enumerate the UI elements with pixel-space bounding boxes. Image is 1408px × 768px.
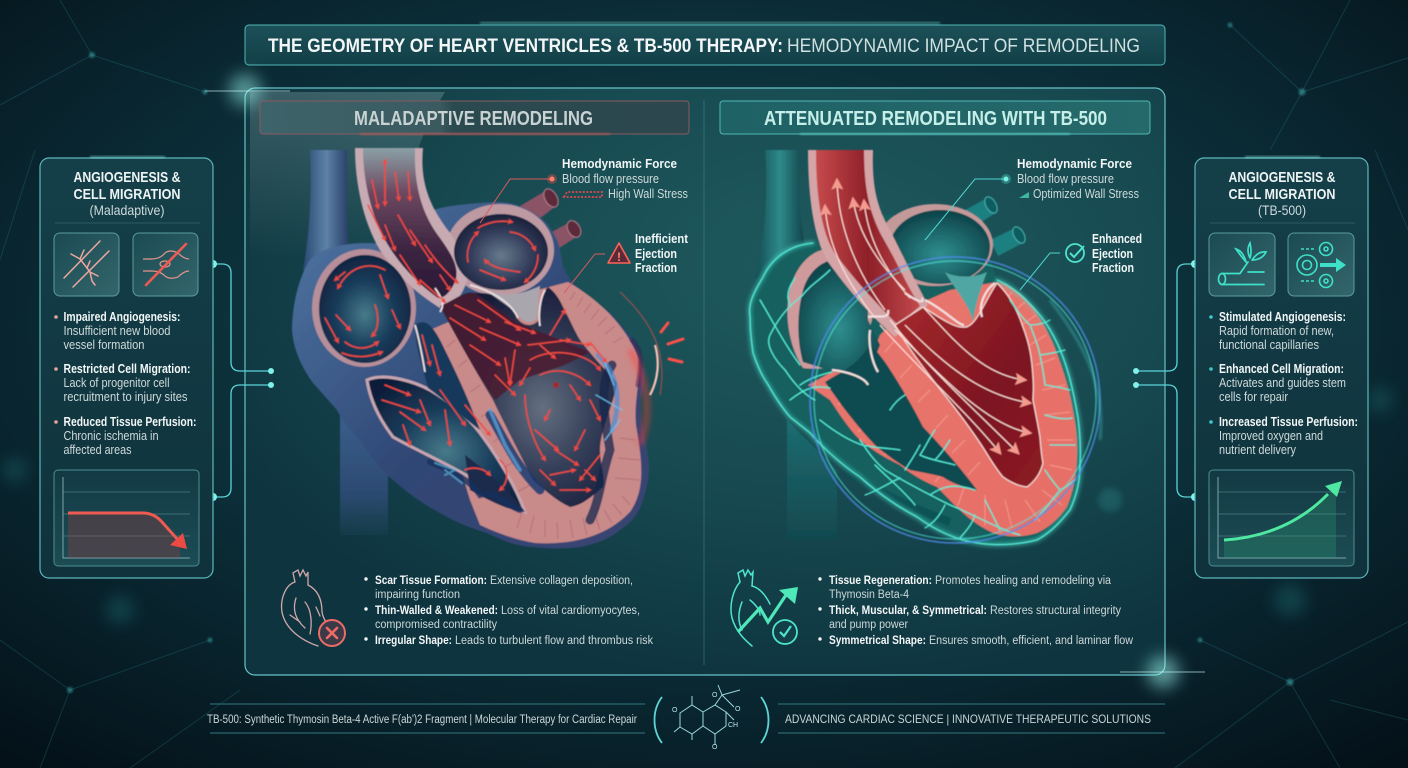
vena cava [755,150,805,280]
icon: molecule [654,685,768,751]
central flow and left ventricle [440,287,617,507]
text block: maladaptive characteristics: compromised contractility [375,619,497,631]
icon: migrating cells [1288,233,1354,296]
callout: hemodynamic force maladaptive: Hemodynamic Force [562,157,677,171]
bullets: TB-500: Enhanced Cell Migration: [1219,362,1344,376]
bullets: TB-500: Increased Tissue Perfusion: [1219,415,1358,429]
atrial wall rings [312,204,554,367]
capillary glow [750,243,1080,545]
heart body [750,215,1080,545]
muscle wall [430,282,641,543]
icon: damaged heart [282,570,345,646]
footer text: tagline: ADVANCING CARDIAC SCIENCE | INNOVATIVE THERAPEUTIC SOLUTIONS [785,712,1151,726]
callout: hemodynamic force TB-500: Optimized Wall Stress [1033,187,1139,201]
heading: maladaptive panel: CELL MIGRATION [74,186,180,203]
footer text: description: TB-500: Synthetic Thymosin Beta-4 Active F(ab')2 Fragment | Molecular Therapy for Cardiac Repair [207,714,637,726]
bullets: maladaptive: Restricted Cell Migration: [64,362,190,376]
text block: TB-500 characteristics: Symmetrical Shape: [829,635,926,647]
panel: angiogenesis maladaptive [40,156,213,578]
heading: TB-500 panel: ANGIOGENESIS & [1228,169,1336,186]
aorta [355,148,468,308]
icon: recovering heart [731,570,798,646]
left atrium wall [877,204,993,286]
callout: hemodynamic force TB-500: Hemodynamic Force [1017,157,1132,171]
callout: inefficient ejection fraction [564,232,689,293]
white flow arrows [825,180,1030,453]
chart: declining perfusion [54,470,199,566]
text block: TB-500 characteristics: Promotes healing and remodeling via [935,575,1112,587]
callout: hemodynamic force TB-500: Blood flow pressure [1017,172,1114,186]
heading: maladaptive panel: (Maladaptive) [90,202,164,218]
lower chamber cap [465,455,525,512]
chamber: upper left atrium [890,210,990,284]
text block: maladaptive characteristics: Loss of vital cardiomyocytes, [501,605,640,617]
bullets: maladaptive: Impaired Angiogenesis: [64,310,180,324]
text block: TB-500 characteristics [818,575,1134,647]
header: maladaptive remodeling: MALADAPTIVE REMODELING [354,108,593,130]
bullets: TB-500: nutrient delivery [1219,443,1297,457]
text block: maladaptive characteristics: impairing function [375,589,460,601]
icon: molecule: O [712,744,718,751]
text block: TB-500 characteristics: Restores structural integrity [990,605,1121,617]
bullets: TB-500 [1209,310,1358,457]
callout: inefficient ejection fraction: Fraction [635,261,677,275]
illustration: maladaptive heart [292,148,683,548]
icon: molecule: CH [728,722,738,729]
callout: inefficient ejection fraction: ! [617,250,621,264]
callout: inefficient ejection fraction: Ejection [635,247,677,261]
chamber: right ventricle [825,345,977,490]
bullets: maladaptive: recruitment to injury sites [64,390,188,404]
title banner [245,22,1165,65]
capillary network [750,243,1080,545]
text block: TB-500 characteristics: Tissue Regeneration: [829,575,932,587]
valves [415,285,545,372]
icon: sprouting vessel [1209,233,1275,296]
bullets: maladaptive [54,310,197,457]
icon: molecule: O [672,707,678,714]
heading: maladaptive panel [74,169,181,218]
callout: hemodynamic force maladaptive [480,157,688,223]
icon: blocked vessel [133,233,198,296]
header: attenuated remodeling: ATTENUATED REMODELING WITH TB-500 [764,108,1107,130]
footer [207,685,1165,751]
header: maladaptive remodeling [260,101,689,135]
heading: maladaptive panel: ANGIOGENESIS & [74,169,181,186]
right atrium wall [787,248,872,369]
heading: TB-500 panel: CELL MIGRATION [1228,186,1336,203]
chamber: right atrium [798,259,880,375]
protective rings [810,257,1101,543]
bullets: maladaptive: Lack of progenitor cell [64,376,170,390]
heading: TB-500 panel [1228,169,1336,218]
muscle wall [808,282,1077,536]
bullets: TB-500: Improved oxygen and [1219,429,1323,443]
icon: molecule: O [712,692,718,699]
icon: broken vessel [54,233,119,296]
bullets: TB-500: Stimulated Angiogenesis: [1219,310,1346,324]
valves [832,283,995,385]
rupture glow [620,292,683,445]
callout: hemodynamic force TB-500 [925,157,1139,240]
chamber: lower right ventricle [367,377,525,512]
vena cava [303,150,350,290]
text block: TB-500 characteristics: and pump power [829,619,908,631]
text block: maladaptive characteristics: Leads to turbulent flow and thrombus risk [455,635,653,647]
chamber: right atrium [319,255,411,363]
bullets: TB-500: Activates and guides stem [1219,376,1346,390]
callout: enhanced ejection fraction [1020,232,1142,290]
text block: maladaptive characteristics: Scar Tissue Formation: [375,575,487,587]
connectors: left panel to main panel [209,260,274,501]
heart body [292,202,649,548]
red flow arrows [325,160,606,490]
LA to septum wedge [478,285,540,322]
title banner: THE GEOMETRY OF HEART VENTRICLES & TB-500 THERAPY: [268,36,783,57]
title banner: HEMODYNAMIC IMPACT OF REMODELING [787,36,1140,57]
bullets: maladaptive: affected areas [64,443,132,457]
bullets: maladaptive: vessel formation [64,338,145,352]
bullets: TB-500: cells for repair [1219,390,1288,404]
callout: hemodynamic force maladaptive: High Wall Stress [608,187,688,201]
illustration: healthy heart [750,150,1122,545]
callout: enhanced ejection fraction: Enhanced [1092,232,1142,246]
great vessels [965,195,1028,256]
callout: hemodynamic force maladaptive: Blood flow pressure [562,172,659,186]
great vessels [520,186,584,250]
scar tissue [430,340,640,520]
chamber: left atrium [454,214,548,290]
chart: rising perfusion [1209,470,1354,566]
bullets: maladaptive: Chronic ischemia in [64,429,159,443]
text block: TB-500 characteristics: Thymosin Beta-4 [829,589,910,601]
left ventricle [895,283,1043,487]
bullets: maladaptive: Reduced Tissue Perfusion: [64,415,196,429]
LA to septum teal wedge [945,272,987,322]
teal lower edge [845,470,950,522]
text block: maladaptive characteristics: Thin-Walled & Weakened: [375,605,498,617]
panel: angiogenesis TB-500 [1195,156,1368,578]
bullets: TB-500: Rapid formation of new, [1219,324,1334,338]
text block: maladaptive characteristics [364,575,653,647]
text block: TB-500 characteristics: Thick, Muscular, & Symmetrical: [829,605,987,617]
callout: enhanced ejection fraction: Fraction [1092,261,1134,275]
bullets: maladaptive: Insufficient new blood [64,324,171,338]
heading: TB-500 panel: (TB-500) [1258,202,1306,218]
aorta tube [808,150,928,337]
icon: molecule: O [735,706,741,713]
chamber: narrow outflow [415,322,480,430]
text block: TB-500 characteristics: Ensures smooth, efficient, and laminar flow [929,635,1134,647]
callout: enhanced ejection fraction: Ejection [1092,247,1133,261]
header: attenuated remodeling [720,101,1150,135]
main comparison panel [205,74,1205,688]
text block: maladaptive characteristics: Irregular Shape: [375,635,452,647]
callout: inefficient ejection fraction: Inefficient [635,232,689,246]
bullets: TB-500: functional capillaries [1219,338,1319,352]
connectors: right panel to main panel [1133,260,1199,501]
text block: maladaptive characteristics: Extensive collagen deposition, [490,575,633,587]
